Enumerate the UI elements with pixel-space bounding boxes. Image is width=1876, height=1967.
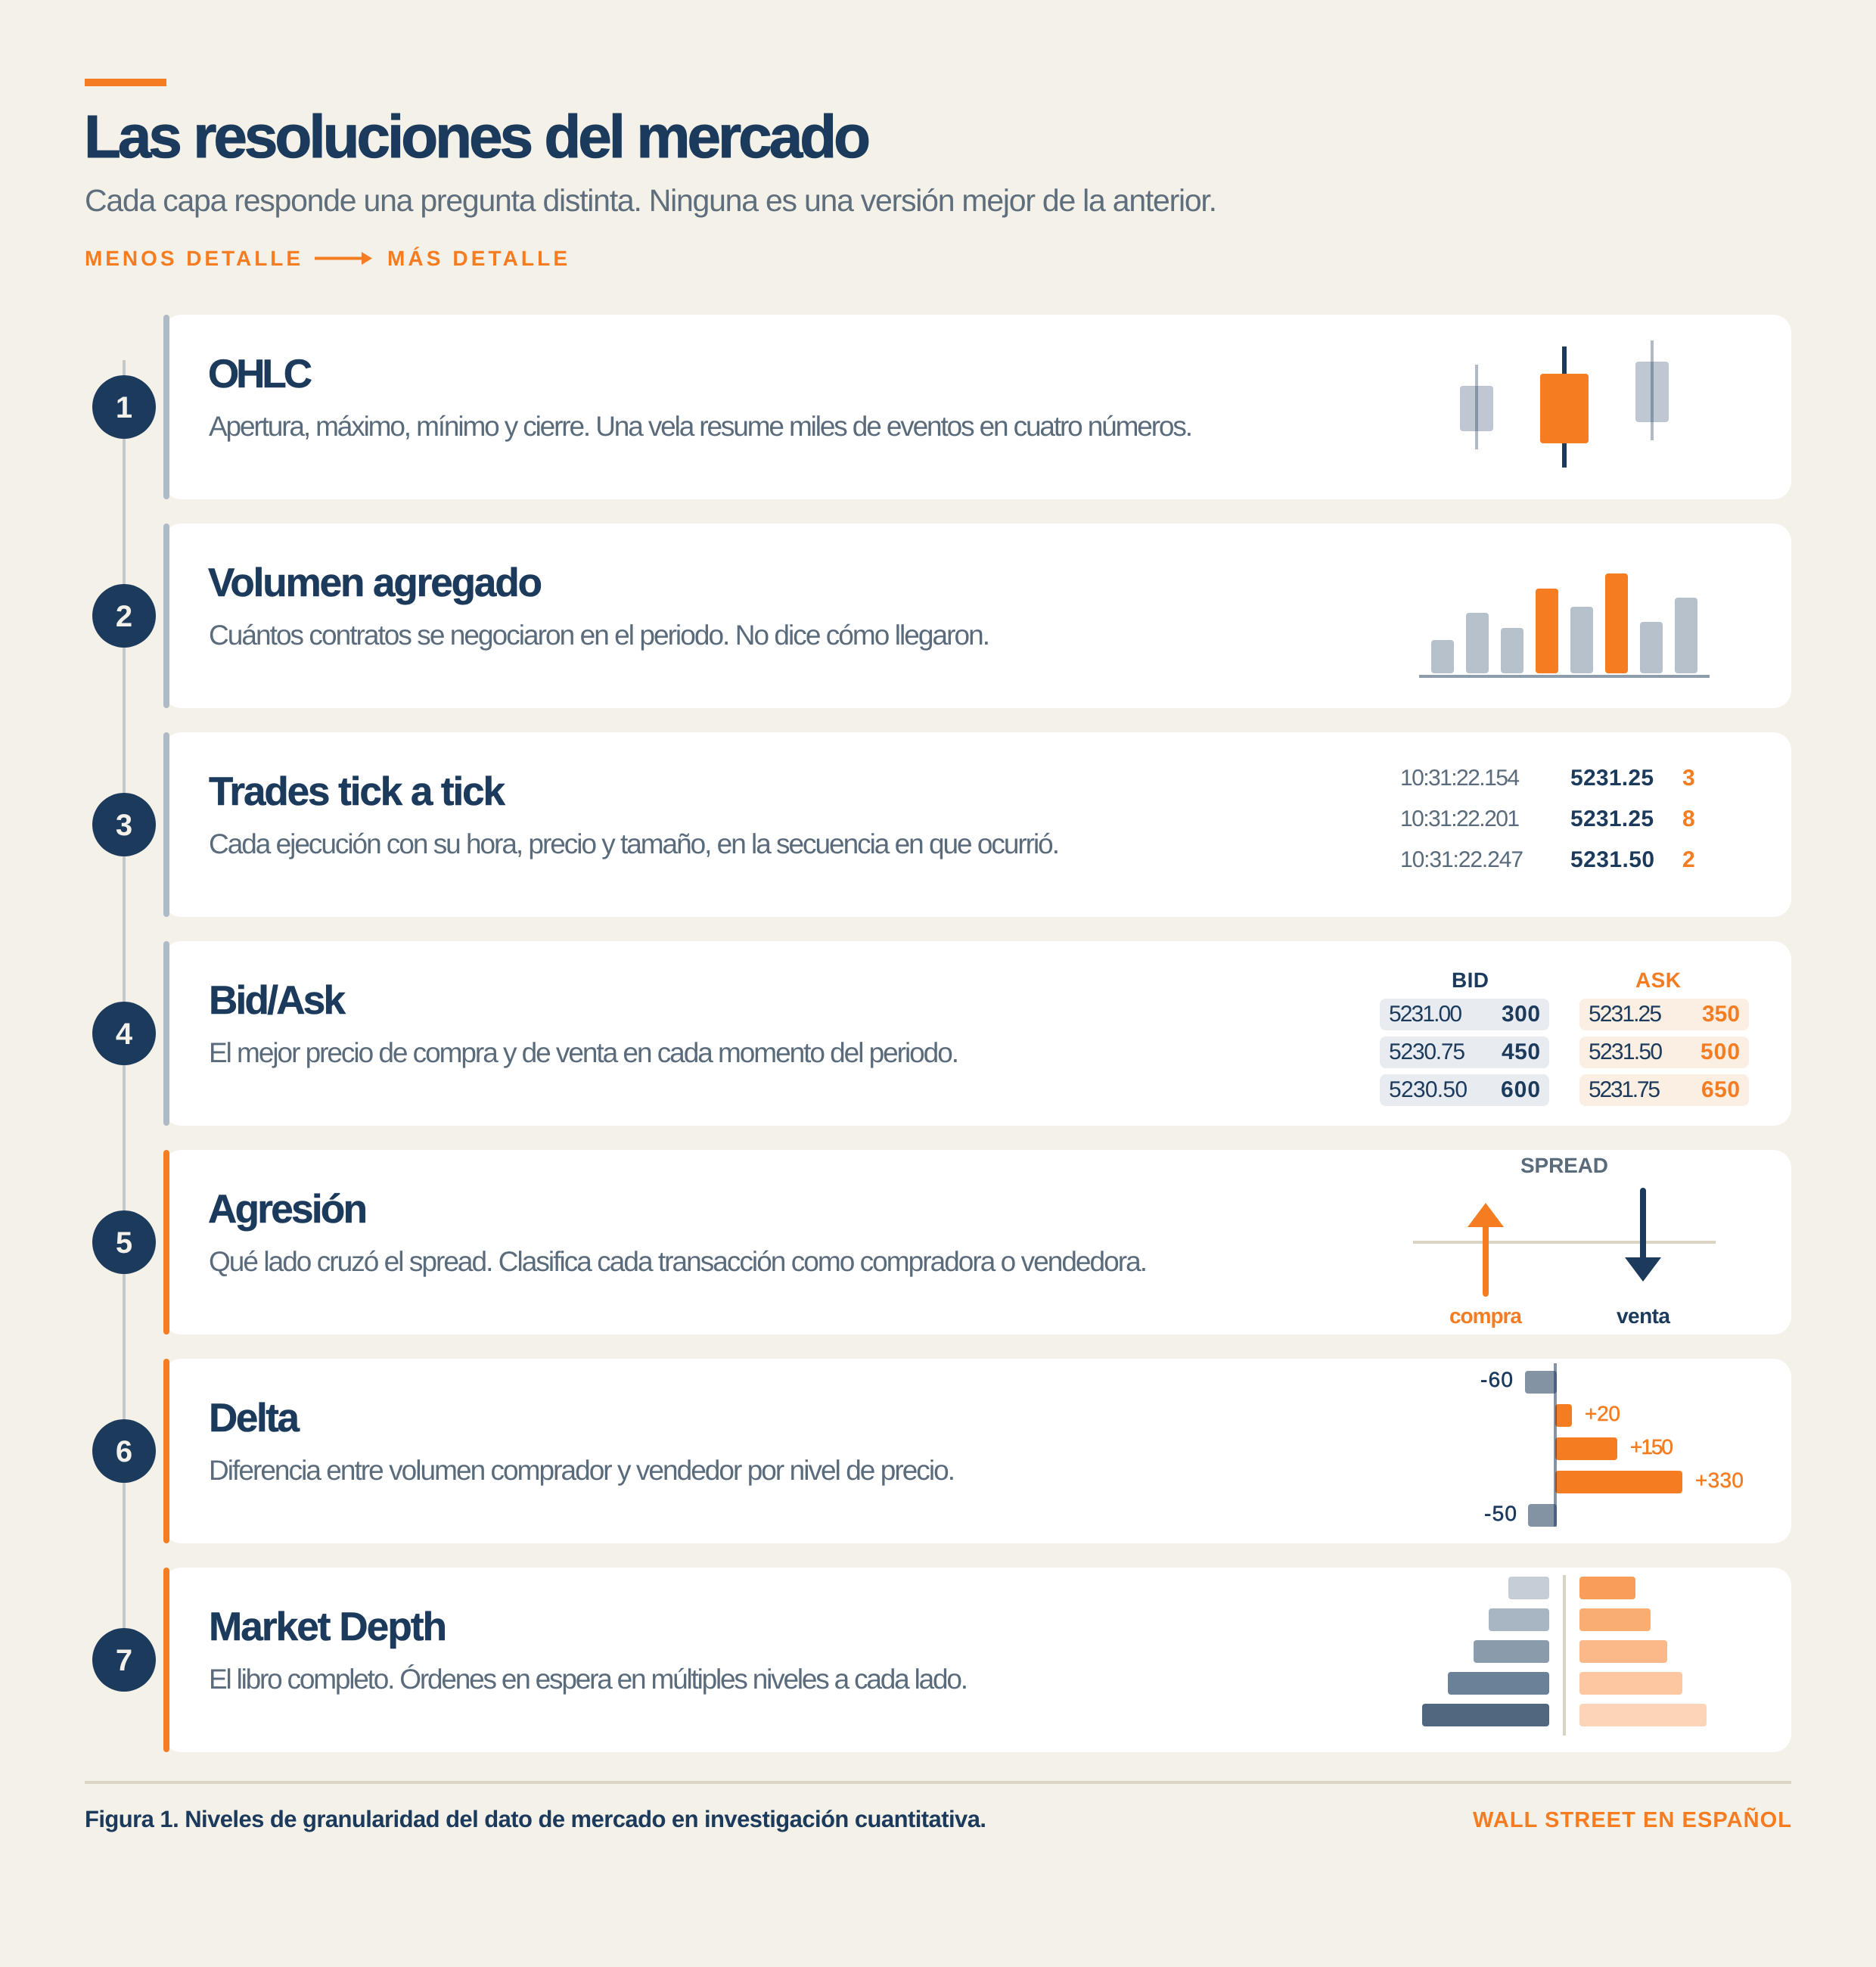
panel: Market Depth: [92, 1568, 1791, 1752]
step number 5: [92, 1210, 156, 1274]
chart: delta bars: +330: [1695, 1468, 1744, 1492]
subtitle: Cada capa responde una pregunta distinta. Ninguna es una versión mejor de la anterior.: [85, 183, 1217, 218]
figure caption: Figura 1. Niveles de granularidad del dato de mercado en investigación cuantitativa.: [85, 1806, 986, 1832]
description: OHLC: Apertura, máximo, mínimo y cierre. Una vela resume miles de eventos en cuatro números.: [209, 411, 1193, 442]
table: trade ticks: 3: [1682, 766, 1695, 791]
panel: Agresión: [92, 1150, 1791, 1335]
scale: less to more detail: [85, 247, 567, 270]
description: Volumen agregado: Cuántos contratos se negociaron en el periodo. No dice cómo llegaron.: [209, 620, 990, 651]
table: bid side: 5231.00: [1389, 1002, 1462, 1027]
description: Delta: Diferencia entre volumen comprador y vendedor por nivel de precio.: [209, 1455, 955, 1486]
step number 6: [92, 1419, 156, 1483]
table: trade ticks: 5231.50: [1570, 847, 1654, 872]
table: ask side: 5231.50: [1589, 1039, 1663, 1064]
timeline rail: [123, 360, 126, 1660]
heading: Delta: Delta: [209, 1396, 300, 1440]
heading: Market Depth: Market Depth: [209, 1605, 447, 1649]
table: ask side: ASK: [1635, 968, 1681, 992]
table: trade ticks: 5231.25: [1570, 806, 1654, 831]
chart: volume bars: [1419, 573, 1710, 678]
table: trade ticks: 2: [1682, 847, 1695, 872]
arrow: buy up: [1468, 1203, 1504, 1297]
label: more detail: MÁS DETALLE: [387, 247, 567, 270]
chart: order book depth: [1422, 1575, 1707, 1735]
table: ask side: 350: [1702, 1002, 1740, 1027]
panel: Volumen agregado: [92, 524, 1791, 708]
step number 4: [92, 1002, 156, 1065]
table: bid side: 5230.50: [1389, 1077, 1468, 1102]
step number 2: 2: [116, 600, 132, 633]
panel: Trades tick a tick: [92, 732, 1791, 917]
table: ask side: 500: [1701, 1039, 1740, 1064]
table: ask side: 5231.75: [1589, 1077, 1660, 1102]
table: trade ticks: 10:31:22.154: [1400, 766, 1520, 791]
step number 2: [92, 584, 156, 648]
diagram: spread crossing: compra: [1449, 1304, 1522, 1328]
table: bid side: 450: [1502, 1039, 1540, 1064]
diagram: spread crossing: venta: [1617, 1304, 1670, 1328]
footer rule: [85, 1781, 1791, 1784]
step number 3: 3: [116, 809, 132, 842]
step number 7: 7: [116, 1644, 132, 1677]
panel: Delta: [92, 1359, 1791, 1543]
chart: delta bars: +20: [1585, 1402, 1620, 1425]
heading: Volumen agregado: Volumen agregado: [208, 561, 542, 605]
diagram: spread crossing: [1413, 1154, 1716, 1328]
step number 1: 1: [116, 391, 132, 424]
header accent bar: [85, 79, 166, 86]
chart: delta bars: +150: [1630, 1435, 1673, 1459]
arrow: detail direction: [315, 252, 372, 265]
chart: delta bars: [1480, 1363, 1744, 1527]
table: trade ticks: 8: [1682, 806, 1695, 831]
description: Market Depth: El libro completo. Órdenes en espera en múltiples niveles a cada lado.: [209, 1664, 968, 1695]
step number 3: [92, 793, 156, 856]
heading: Bid/Ask: Bid/Ask: [209, 978, 346, 1023]
table: trade ticks: 10:31:22.247: [1400, 847, 1523, 872]
title: Las resoluciones del mercado: [84, 103, 871, 170]
label: less detail: MENOS DETALLE: [85, 247, 300, 270]
panel: Bid/Ask: [92, 941, 1791, 1126]
step number 7: [92, 1628, 156, 1692]
table: ask side: 650: [1701, 1077, 1740, 1102]
step number 1: [92, 375, 156, 439]
table: bid side: 300: [1502, 1002, 1540, 1027]
table: trade ticks: 10:31:22.201: [1400, 806, 1520, 831]
heading: Trades tick a tick: Trades tick a tick: [209, 769, 506, 814]
step number 4: 4: [116, 1018, 133, 1051]
heading: Agresión: Agresión: [208, 1187, 368, 1232]
table: trade ticks: [1400, 766, 1695, 872]
table: bid side: BID: [1452, 968, 1489, 992]
chart: candlesticks: [1460, 340, 1669, 468]
panel: OHLC: [92, 315, 1791, 499]
brand signature: WALL STREET EN ESPAÑOL: [1473, 1807, 1791, 1832]
heading: OHLC: OHLC: [208, 352, 312, 396]
table: trade ticks: 5231.25: [1570, 766, 1654, 791]
description: Agresión: Qué lado cruzó el spread. Clasifica cada transacción como compradora o vendedora.: [209, 1246, 1148, 1277]
chart: delta bars: -60: [1480, 1368, 1513, 1391]
diagram: spread crossing: SPREAD: [1520, 1154, 1608, 1177]
table: ask side: [1579, 968, 1749, 1106]
table: ask side: 5231.25: [1589, 1002, 1662, 1027]
table: bid side: [1380, 968, 1549, 1106]
step number 5: 5: [116, 1226, 132, 1260]
table: bid side: 600: [1501, 1077, 1540, 1102]
step number 6: 6: [116, 1435, 132, 1468]
description: Bid/Ask: El mejor precio de compra y de venta en cada momento del periodo.: [209, 1037, 959, 1068]
table: bid side: 5230.75: [1389, 1039, 1465, 1064]
arrow: sell down: [1625, 1188, 1661, 1282]
description: Trades tick a tick: Cada ejecución con su hora, precio y tamaño, en la secuencia en que ocurrió.: [209, 828, 1060, 859]
chart: delta bars: -50: [1484, 1502, 1517, 1525]
